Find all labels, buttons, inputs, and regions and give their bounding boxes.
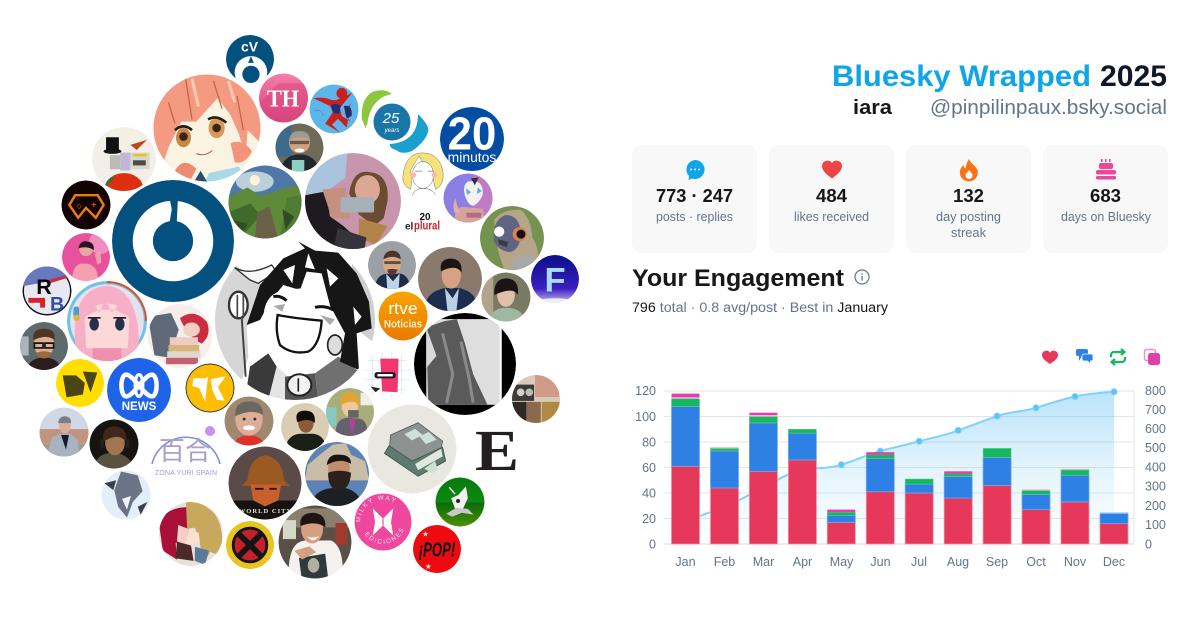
avatar: pilot with headset — [90, 420, 138, 468]
avatar: gamepad logo: ◇ — [76, 203, 82, 210]
month labels: Jan — [675, 555, 696, 569]
avatar: 25 years logo: 25 — [382, 110, 400, 127]
avatar: elPlural logo — [403, 202, 443, 242]
title: Bluesky Wrapped — [832, 60, 1091, 93]
chart legend icons — [1042, 349, 1160, 365]
avatar: rtve Noticias: rtve — [388, 299, 418, 318]
avatar: elPlural logo: el — [405, 222, 414, 232]
avatar: pink-haired anime girl — [67, 281, 147, 361]
stat card: posts and replies — [632, 145, 757, 253]
heading: Your Engagement: Your Engagement — [632, 265, 844, 292]
right axis labels: 600 — [1145, 422, 1166, 436]
avatar: rtve Noticias: Noticias — [384, 318, 422, 330]
avatar: TH: TH — [267, 85, 299, 112]
avatar: 25 years logo — [362, 90, 428, 153]
avatar: iPOP comic logo: ★ — [422, 530, 429, 539]
avatar: pig mask — [444, 174, 492, 222]
avatar: monochrome illustration — [102, 470, 150, 520]
avatar: Zona Yuri Spain: ZONA YURI SPAIN — [155, 470, 217, 477]
avatar: cartoon pigeon — [480, 206, 544, 270]
stat card: posting streak: streak — [951, 226, 987, 240]
right axis labels: 700 — [1145, 403, 1166, 417]
cumulative points — [838, 389, 1117, 468]
icon: heart — [822, 161, 842, 178]
stacked bars: quotes — [672, 394, 1128, 513]
avatar: collage of photos — [512, 375, 560, 423]
avatar: Reigen anime — [326, 388, 374, 436]
avatar: cV logo: cV — [241, 38, 259, 54]
icon: quotes squares — [1144, 350, 1160, 365]
stat card: likes received: 484 — [816, 186, 847, 206]
stat card: posts and replies: 773 · 247 — [656, 186, 733, 206]
avatar: El Español E logo: E — [475, 418, 519, 483]
avatar: man with book — [278, 506, 352, 580]
avatar: book illustration — [368, 404, 456, 494]
month labels: Oct — [1026, 555, 1046, 569]
month labels: Nov — [1064, 555, 1087, 569]
stat card: posting streak: day posting — [936, 210, 1001, 224]
avatar: red-haired person with books — [148, 304, 212, 368]
avatar: TH — [259, 74, 308, 122]
avatar: pink cartoon on grid — [363, 351, 411, 399]
avatar: 20 minutos: 20 — [448, 107, 496, 159]
avatar: pink portrait — [62, 231, 112, 281]
avatar: 20 minutos — [440, 107, 504, 171]
avatar: RB badge: B — [50, 294, 64, 316]
avatar: 20 minutos: minutos — [448, 149, 496, 165]
stacked bars: replies — [672, 406, 1128, 524]
right axis labels: 200 — [1145, 499, 1166, 513]
avatar: gamepad logo: + — [91, 199, 96, 209]
avatar: El Español E logo — [461, 414, 533, 486]
avatar: iPOP comic logo: ★ — [425, 562, 432, 571]
stacked bars: likes — [672, 460, 1128, 544]
combined chart: monthly engagement bars with cumulative line — [635, 384, 1166, 569]
avatar: large manga portrait — [215, 240, 375, 400]
avatar: 25 years logo: years — [384, 128, 399, 134]
left axis labels: 40 — [642, 486, 656, 500]
cumulative line — [686, 392, 1114, 521]
avatar: elPlural logo: plural — [414, 220, 440, 232]
right axis labels: 500 — [1145, 441, 1166, 455]
avatar: radio host — [276, 124, 324, 172]
avatar: TK yellow logo — [186, 364, 234, 412]
avatar: F game logo: F — [544, 261, 566, 299]
user name and handle: @pinpilinpaux.bsky.social — [930, 96, 1167, 119]
avatar: RB badge: R — [36, 274, 52, 299]
right axis labels — [1145, 384, 1166, 552]
avatar: rtve Noticias — [378, 292, 428, 340]
avatar: large dN logo — [112, 180, 234, 302]
avatar: Milky Way Ediciones — [354, 494, 412, 550]
avatar: Zona Yuri Spain: 百合 — [159, 431, 211, 468]
left axis labels: 80 — [642, 436, 656, 450]
avatar: DV yellow logo — [56, 359, 104, 407]
avatar: Zona Yuri Spain — [150, 412, 222, 484]
month labels: Jul — [911, 555, 927, 569]
stat card: posting streak — [906, 145, 1031, 253]
avatar: man in dark shirt — [281, 403, 329, 451]
icon: reposts arrows — [1111, 349, 1125, 365]
icon: flame — [960, 159, 978, 181]
month labels: Sep — [986, 555, 1008, 569]
right axis labels: 100 — [1145, 518, 1166, 532]
engagement summary: 796 total · 0.8 avg/post · Best in January — [632, 300, 888, 315]
month labels: Apr — [793, 555, 812, 569]
avatar: iPOP comic logo — [413, 525, 461, 573]
avatar: X-Men logo — [226, 521, 274, 569]
month labels — [675, 555, 1125, 569]
avatar: woman selfie — [305, 153, 401, 249]
icon: info — [855, 270, 869, 284]
avatar: blonde doodle — [402, 152, 444, 196]
left axis labels: 100 — [635, 410, 656, 424]
stat card: days on Bluesky — [1043, 145, 1168, 253]
avatar: gamepad logo — [62, 180, 110, 230]
avatar: ABC News: NEWS — [122, 399, 156, 413]
stat card: likes received: likes received — [794, 210, 869, 224]
icon: speech bubble — [686, 160, 705, 180]
avatar: bearded man — [305, 442, 369, 506]
left axis labels — [635, 384, 656, 552]
avatar: peach-haired anime girl — [154, 74, 260, 182]
avatar: man with glasses — [368, 241, 416, 289]
month labels: Aug — [947, 555, 969, 569]
avatar: iPOP comic logo: ¡POP! — [419, 540, 455, 562]
cumulative area — [686, 392, 1114, 544]
stat card: days on Bluesky: 683 — [1090, 186, 1121, 206]
month labels: Jun — [870, 555, 891, 569]
avatar: Milky Way Ediciones: MILKY WAY — [356, 495, 396, 522]
avatar: elPlural logo: 20 — [419, 212, 431, 223]
icon: likes heart — [1042, 351, 1058, 364]
right axis labels: 800 — [1145, 384, 1166, 398]
avatar: man in suit — [418, 247, 482, 311]
stat card: days on Bluesky: days on Bluesky — [1061, 210, 1152, 224]
month labels: Mar — [753, 555, 774, 569]
avatar: RB badge — [22, 266, 72, 316]
avatar: mountain landscape — [228, 166, 302, 238]
month labels: Dec — [1103, 555, 1125, 569]
avatar: Milky Way Ediciones: EDICIONES — [364, 528, 404, 544]
left axis labels: 0 — [649, 538, 656, 552]
right axis labels: 300 — [1145, 480, 1166, 494]
avatar: paper snowman — [92, 127, 156, 191]
title: 2025 — [1100, 60, 1167, 93]
left axis labels: 120 — [635, 384, 656, 398]
avatar: F game logo — [531, 255, 579, 306]
avatar: helmet soldier — [228, 446, 302, 520]
left axis labels: 60 — [642, 461, 656, 475]
icon: replies bubbles — [1076, 349, 1093, 364]
stat card: likes received — [769, 145, 894, 253]
right axis labels: 0 — [1145, 538, 1152, 552]
avatar: kissing anime couple — [159, 502, 223, 566]
avatar: smiling man in red shirt — [224, 396, 274, 446]
avatar: helmet soldier: WORLD CITY — [239, 508, 292, 515]
stat card: posting streak: 132 — [953, 186, 984, 206]
avatar: city panorama man — [40, 408, 88, 456]
user name and handle: iara — [853, 96, 893, 119]
avatar: ABC News — [107, 358, 171, 422]
avatar: young man portrait — [482, 272, 530, 322]
avatar: green cartoon creature — [436, 478, 484, 526]
stacked bars: reposts — [672, 399, 1089, 515]
month labels: May — [830, 555, 854, 569]
avatar: black and white hair photo — [414, 313, 516, 415]
avatar: man with thick glasses — [20, 322, 68, 370]
stat card: posts and replies: posts · replies — [656, 210, 733, 224]
left axis labels: 20 — [642, 512, 656, 526]
avatar: cV logo — [226, 35, 274, 83]
grid lines — [664, 391, 1134, 544]
right axis labels: 400 — [1145, 460, 1166, 474]
avatar bubble cluster — [20, 35, 579, 578]
month labels: Feb — [714, 555, 735, 569]
avatar: spiderman — [310, 84, 358, 134]
icon: birthday cake — [1096, 159, 1116, 180]
